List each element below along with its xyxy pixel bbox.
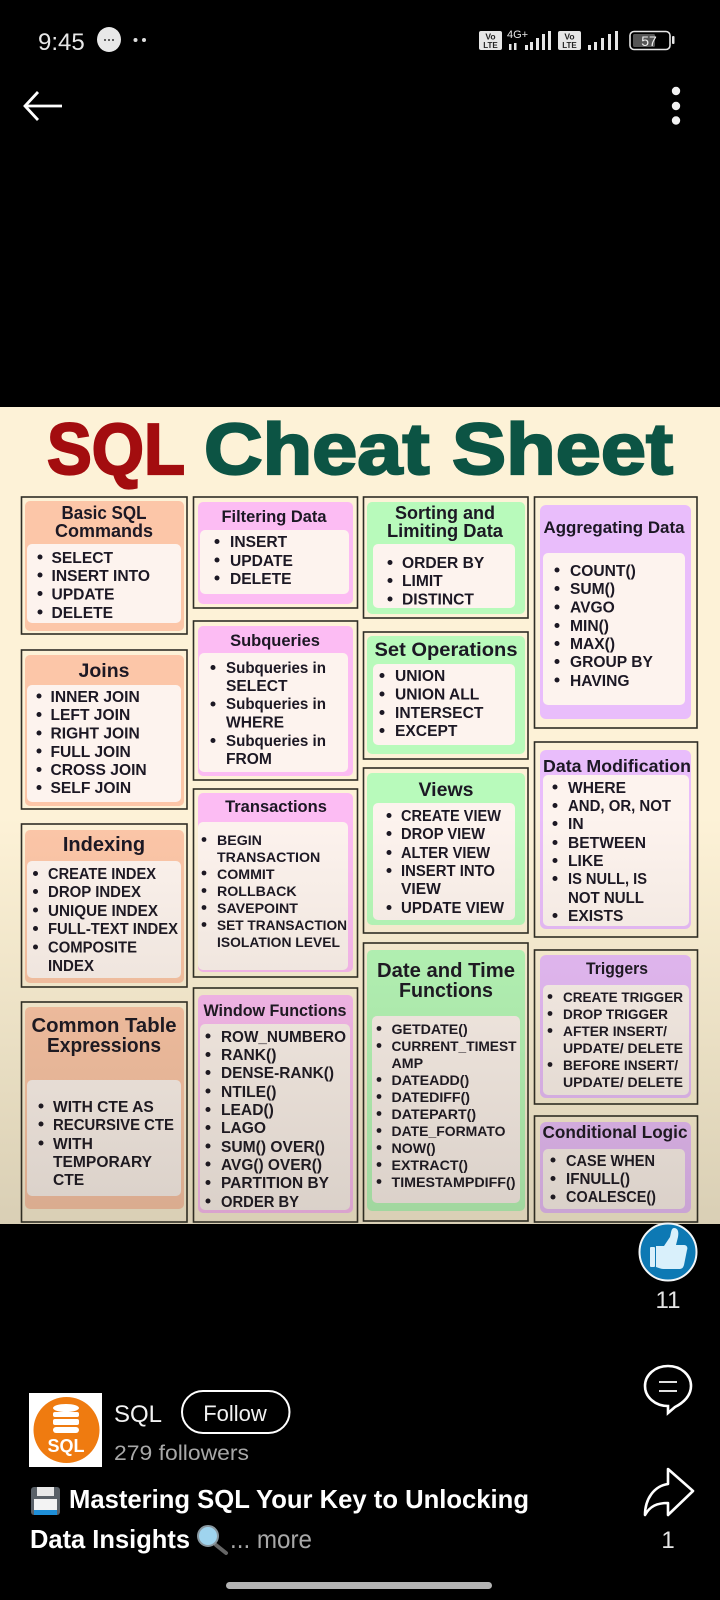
list: GROUP BY [570, 654, 653, 671]
heading: Transactions [225, 798, 327, 816]
list: WITH CTE AS [53, 1099, 154, 1116]
heading: Common Table [32, 1015, 176, 1037]
icon: floppy disk [31, 1487, 60, 1515]
list: FULL JOIN [50, 744, 131, 761]
list [210, 660, 326, 768]
like count: 11 [656, 1287, 680, 1314]
list: INDEX [48, 958, 95, 975]
list: MAX() [570, 636, 615, 653]
list: AFTER INSERT/ [563, 1024, 667, 1040]
list: DELETE [230, 571, 292, 588]
list: AMP [392, 1056, 423, 1072]
list: WHERE [226, 714, 284, 732]
panel: Set Operations [364, 632, 528, 759]
list [214, 534, 293, 588]
list: NOW() [392, 1141, 436, 1157]
heading: Set Operations [374, 639, 518, 661]
caption line 2: Data Insights [30, 1524, 190, 1554]
icon: VoLTE badge 1: LTE [483, 41, 498, 50]
follower count: 279 followers [114, 1442, 249, 1465]
heading line 2: Functions [399, 980, 493, 1002]
list: ISOLATION LEVEL [217, 935, 340, 951]
list: LAGO [221, 1120, 266, 1137]
icon: share arrow [645, 1469, 693, 1515]
icon: 4G+ signal: 4G+ [507, 29, 528, 41]
icon: VoLTE badge 2 [558, 31, 581, 50]
heading: Triggers [586, 960, 648, 978]
list: ORDER BY [402, 555, 485, 572]
list: CREATE INDEX [48, 866, 157, 883]
list: CURRENT_TIMEST [392, 1039, 517, 1055]
list: DENSE-RANK() [221, 1065, 334, 1082]
list: DATEADD() [392, 1073, 470, 1089]
panel: Subqueries [194, 621, 358, 780]
list: CASE WHEN [566, 1153, 655, 1170]
channel avatar: SQL logo [29, 1393, 102, 1467]
list: SUM() OVER() [221, 1139, 325, 1156]
list: DROP INDEX [48, 884, 142, 901]
list: EXCEPT [395, 723, 458, 740]
list: COMPOSITE [48, 940, 137, 956]
list: COMMIT [217, 867, 275, 883]
list: ALTER VIEW [401, 845, 490, 862]
list: UPDATE/ DELETE [563, 1075, 683, 1091]
list: BEGIN [217, 833, 262, 849]
panel: Joins [22, 650, 187, 809]
icon: message bubble [97, 27, 121, 52]
list [548, 990, 683, 1091]
list: DISTINCT [402, 592, 474, 608]
list: FULL-TEXT INDEX [48, 921, 179, 938]
clock: 9:45 [38, 29, 85, 56]
home indicator [226, 1582, 492, 1589]
list: SELECT [52, 550, 113, 567]
heading: Joins [79, 660, 130, 682]
channel name: SQL [114, 1401, 162, 1428]
icon: back arrow [24, 92, 62, 120]
list [202, 833, 347, 951]
list: NTILE() [221, 1084, 276, 1101]
list: Subqueries in [226, 696, 326, 713]
icon: notification dots [134, 38, 146, 42]
more link: ... more [230, 1524, 312, 1554]
channel avatar: SQL logo: SQL [47, 1436, 85, 1456]
list: INNER JOIN [50, 689, 140, 706]
heading: Filtering Data [222, 508, 327, 526]
icon: like thumb button [640, 1224, 696, 1280]
heading: Views [419, 779, 474, 801]
list: SET TRANSACTION [217, 918, 347, 934]
heading line 2: Commands [55, 521, 153, 541]
heading: Date and Time [377, 960, 515, 982]
panel: Common Table Expressions [22, 1002, 187, 1222]
list: INTERSECT [395, 705, 484, 722]
list: Subqueries in [226, 733, 326, 750]
follow button: Follow [203, 1401, 267, 1426]
list: GETDATE() [392, 1022, 468, 1038]
list [550, 1153, 656, 1206]
heading: Subqueries [230, 632, 320, 650]
list: Subqueries in [226, 660, 326, 677]
icon: battery 57 [630, 32, 674, 50]
panel: Window Functions [194, 988, 358, 1222]
list: WITH [53, 1136, 93, 1153]
icon: VoLTE badge 1 [479, 31, 502, 50]
list [36, 689, 147, 797]
icon: battery 57: 57 [641, 33, 657, 49]
heading: Conditional Logic [542, 1122, 688, 1142]
icon: VoLTE badge 1: Vo [485, 32, 496, 42]
list: UNION [395, 668, 445, 685]
list: ROLLBACK [217, 884, 297, 900]
list: COUNT() [570, 563, 636, 580]
list: UNION ALL [395, 686, 480, 704]
list [386, 808, 504, 917]
heading: Window Functions [204, 1002, 346, 1020]
heading line 2: Limiting Data [387, 521, 504, 541]
infographic: SQL cheat sheet [0, 407, 720, 1224]
list: COALESCE() [566, 1189, 656, 1206]
list [388, 555, 485, 608]
panel: Filtering Data [194, 497, 358, 608]
list: CROSS JOIN [50, 762, 147, 779]
list: LEFT JOIN [50, 707, 130, 724]
panel: Transactions [194, 789, 358, 977]
share count: 1 [661, 1527, 675, 1554]
list: SELECT [226, 678, 288, 695]
panel: Date and Time Functions [364, 943, 528, 1221]
panel: Conditional Logic [534, 1116, 698, 1222]
panel: Sorting and Limiting Data [364, 497, 528, 618]
list: AVGO [570, 600, 615, 616]
panel: Data Modification [534, 742, 698, 937]
list: LEAD() [221, 1102, 274, 1119]
icon: VoLTE badge 2: LTE [562, 41, 577, 50]
list: TEMPORARY [53, 1154, 153, 1171]
panel: Basic SQL Commands [22, 497, 187, 634]
list: AVG() OVER() [221, 1157, 322, 1174]
list: HAVING [570, 673, 630, 690]
list: AND, OR, NOT [568, 798, 671, 815]
icon: magnifier [198, 1526, 226, 1553]
caption line 1: Mastering SQL Your Key to Unlocking [69, 1484, 529, 1514]
heading: Basic SQL [62, 503, 146, 523]
icon: 4G+ signal [507, 29, 551, 50]
list: DELETE [52, 605, 113, 622]
panel: Triggers [534, 950, 698, 1104]
list [38, 1099, 174, 1189]
title: Cheat Sheet [204, 410, 673, 490]
heading: Sorting and [395, 503, 495, 523]
heading: Indexing [63, 834, 145, 856]
list [38, 550, 150, 622]
list: LIMIT [402, 573, 443, 590]
list: WHERE [568, 780, 626, 797]
list: INSERT INTO [52, 568, 150, 585]
icon: VoLTE badge 2: Vo [564, 32, 575, 42]
list: ORDER BY [221, 1194, 300, 1211]
heading line 2: Expressions [47, 1035, 161, 1057]
icon: overflow menu [672, 87, 680, 125]
list [380, 668, 484, 740]
list: TIMESTAMPDIFF() [392, 1175, 516, 1191]
list [206, 1029, 346, 1211]
list: DATEDIFF() [392, 1090, 470, 1106]
icon: comment [645, 1366, 691, 1413]
list: IFNULL() [566, 1171, 630, 1188]
list [377, 1022, 517, 1191]
heading: Data Modification [543, 756, 691, 776]
list [554, 563, 653, 690]
panel: Views [364, 768, 528, 933]
list: CREATE VIEW [401, 808, 501, 825]
list: DATE_FORMATO [392, 1124, 506, 1140]
icon: signal bars [588, 31, 618, 50]
list: VIEW [401, 881, 441, 898]
list: ROW_NUMBERO [221, 1029, 346, 1046]
list: IN [568, 816, 584, 833]
list: FROM [226, 751, 272, 768]
list: BETWEEN [568, 835, 646, 852]
list: INSERT INTO [401, 863, 495, 880]
list: RANK() [221, 1047, 276, 1064]
list: UPDATE [230, 553, 293, 570]
list: NOT NULL [568, 890, 644, 907]
list: EXTRACT() [392, 1158, 468, 1174]
list: DROP VIEW [401, 826, 485, 843]
list: RIGHT JOIN [50, 726, 140, 742]
panel: Aggregating Data [534, 497, 697, 728]
list: BEFORE INSERT/ [563, 1058, 678, 1074]
list: TRANSACTION [217, 850, 320, 866]
list: PARTITION BY [221, 1175, 330, 1192]
list: SELF JOIN [50, 780, 131, 797]
list: DROP TRIGGER [563, 1007, 668, 1023]
panel: Indexing [22, 824, 187, 987]
list: RECURSIVE CTE [53, 1117, 174, 1134]
list: EXISTS [568, 908, 623, 925]
title: SQL [47, 410, 185, 490]
list [552, 780, 671, 925]
list: LIKE [568, 853, 604, 870]
list: DATEPART() [392, 1107, 476, 1123]
list [33, 866, 179, 975]
list: UNIQUE INDEX [48, 903, 159, 920]
list: CREATE TRIGGER [563, 990, 683, 1006]
list: SUM() [570, 581, 615, 598]
list: UPDATE [52, 586, 114, 604]
heading: Aggregating Data [544, 518, 685, 537]
status bar [38, 27, 674, 56]
list: UPDATE VIEW [401, 900, 504, 917]
list: IS NULL, IS [568, 871, 647, 888]
list: CTE [53, 1172, 84, 1189]
list: MIN() [570, 618, 609, 635]
list: INSERT [230, 534, 288, 551]
list: SAVEPOINT [217, 901, 298, 917]
list: UPDATE/ DELETE [563, 1041, 683, 1057]
follow button [182, 1391, 290, 1433]
